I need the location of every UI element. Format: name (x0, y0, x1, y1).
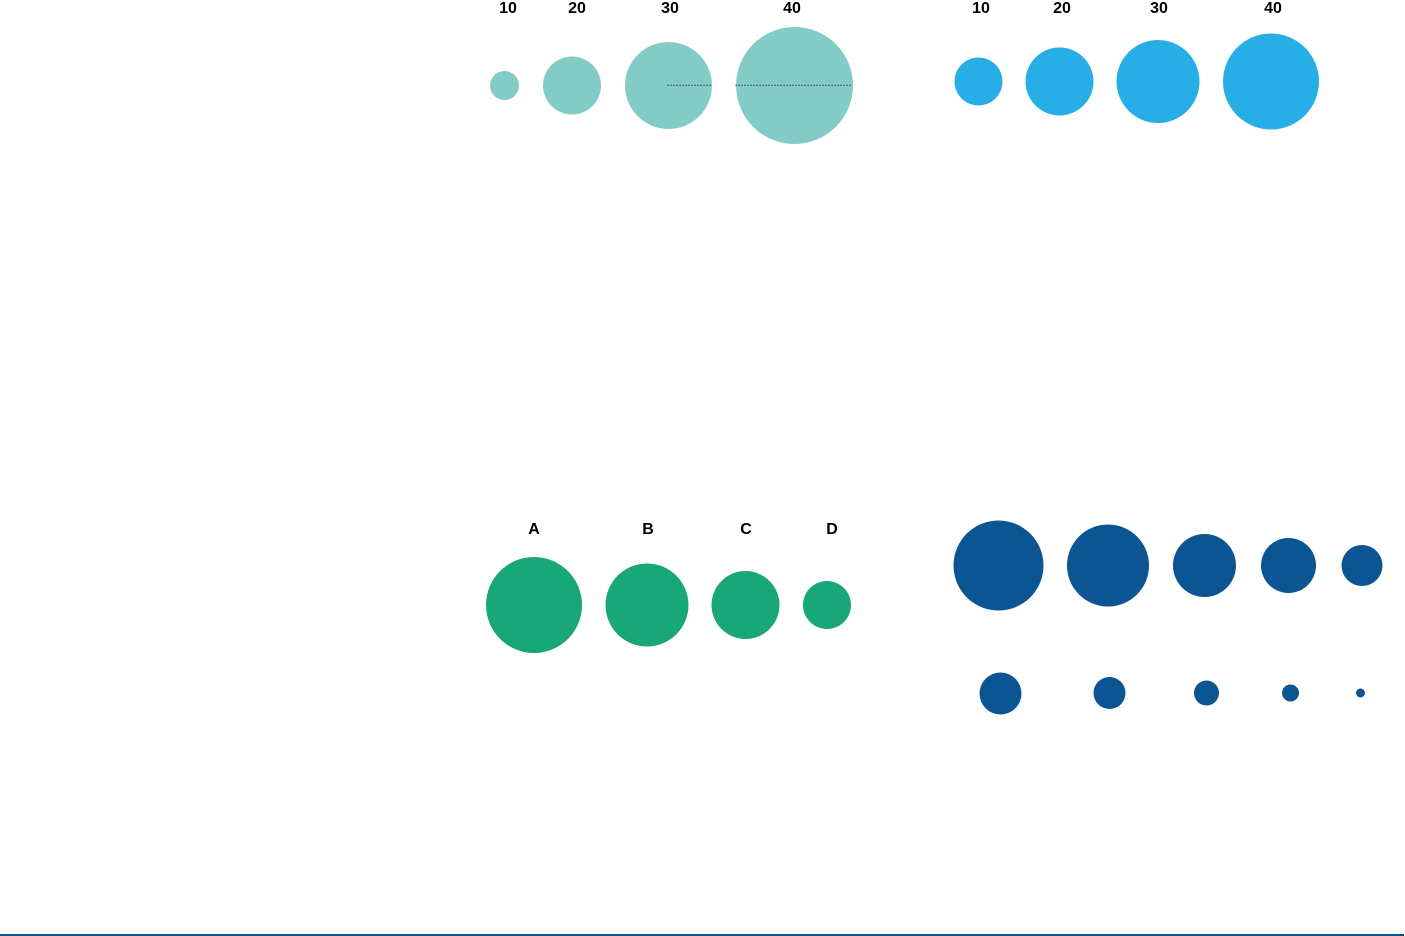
navy circle row 1-3 (1173, 534, 1236, 597)
label: B: B (642, 521, 654, 538)
label: C: C (740, 521, 752, 538)
navy circle row 1-4 (1261, 538, 1316, 593)
dotted diameter line 40 (736, 84, 853, 86)
panel: blue bubble scale (954, 0, 1319, 130)
label: 30: 30 (661, 0, 679, 17)
navy circle row 2-3 (1194, 680, 1219, 706)
label: 20: 20 (568, 0, 586, 17)
label: 10: 10 (499, 0, 517, 17)
navy circle row 2-4 (1282, 684, 1299, 702)
teal circle 30 (625, 42, 712, 129)
navy circle row 1-5 (1342, 545, 1382, 586)
navy circle row 2-2 (1094, 677, 1126, 709)
label: 30: 30 (1150, 0, 1168, 17)
blue circle 10 (954, 58, 1002, 106)
bottom rule (0, 934, 1404, 936)
green circle D (803, 581, 851, 629)
panel: navy bubbles (954, 520, 1382, 714)
teal circle 20 (543, 56, 601, 114)
green circle C (712, 571, 780, 639)
navy circle row 2-1 (980, 672, 1022, 714)
teal circle 10 (490, 71, 519, 100)
blue circle 20 (1026, 48, 1094, 116)
panel: green bubbles A to D (486, 521, 851, 653)
label: 10: 10 (972, 0, 990, 17)
label: 40: 40 (1264, 0, 1282, 17)
green circle B (606, 564, 688, 646)
navy circle row 1-1 (954, 520, 1044, 610)
label: 40: 40 (783, 0, 801, 17)
teal circle 40 (736, 27, 853, 144)
blue circle 40 (1223, 34, 1319, 130)
navy circle row 2-5 (1356, 688, 1365, 698)
blue circle 30 (1116, 40, 1200, 123)
label: D: D (826, 521, 838, 538)
label: 20: 20 (1053, 0, 1071, 17)
green circle A (486, 557, 582, 653)
panel: teal bubble scale (490, 0, 853, 144)
navy circle row 1-2 (1067, 524, 1149, 606)
dotted radius line 30 (668, 84, 713, 86)
label: A: A (528, 521, 540, 538)
